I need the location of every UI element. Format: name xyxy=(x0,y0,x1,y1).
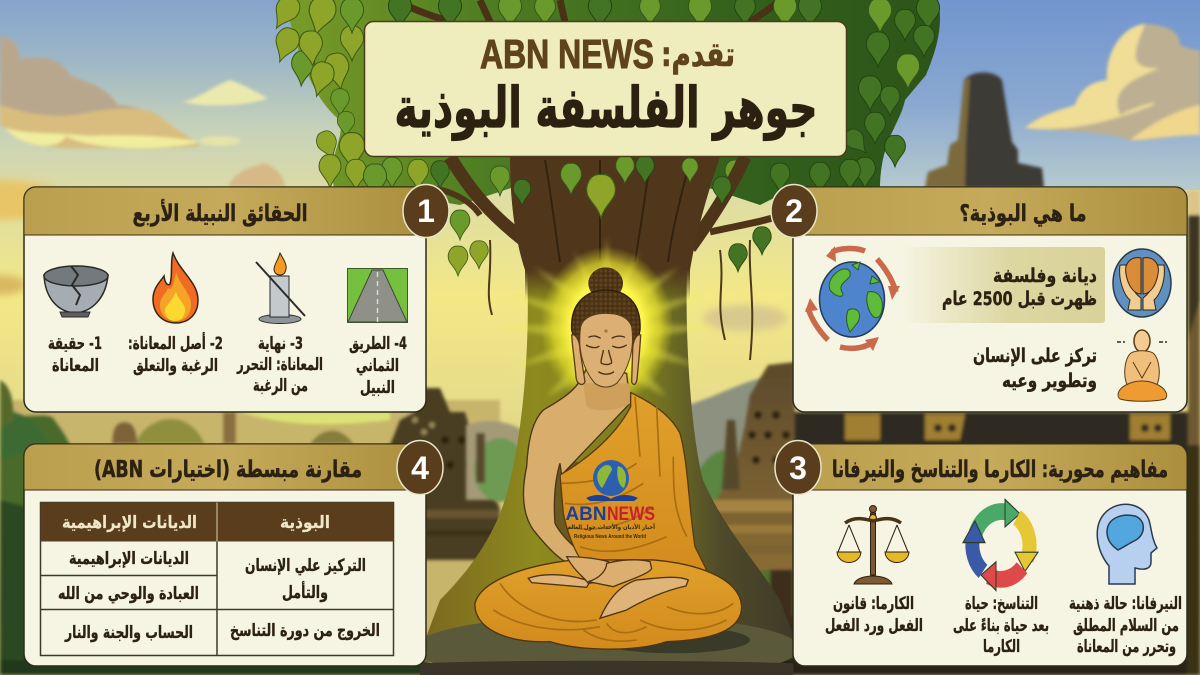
label karma xyxy=(825,594,923,636)
label reincarnation: التناسخ: حياة xyxy=(965,594,1038,614)
highlight band xyxy=(900,247,1105,323)
icon: globe with arrows xyxy=(805,246,900,351)
badge 4 xyxy=(397,440,443,494)
panel 3 header xyxy=(793,444,1187,490)
hair xyxy=(572,267,640,347)
face and ears xyxy=(572,313,641,387)
text: religion and philosophy: ظهرت قبل 2500 عام xyxy=(942,288,1097,310)
badge 4: 4 xyxy=(411,450,429,486)
title line one: ABN NEWS xyxy=(480,31,654,77)
ABN NEWS logo: Religious News Around the World xyxy=(574,534,646,540)
title panel xyxy=(364,22,846,156)
label 3: من الرغبة xyxy=(253,376,308,396)
text: focus on human: تركز على الإنسان xyxy=(973,345,1097,367)
ABN NEWS logo: NEWS xyxy=(607,504,655,525)
table header: البوذية xyxy=(280,513,330,533)
label nirvana xyxy=(1069,594,1182,657)
label karma: الفعل ورد الفعل xyxy=(825,616,923,636)
robe upper xyxy=(560,393,707,583)
label reincarnation: بعد حياة بناءً على xyxy=(953,616,1049,636)
label 4: الثماني xyxy=(356,356,399,376)
table rows: الحساب والجنة والنار xyxy=(64,623,193,643)
icon: meditating person xyxy=(1117,330,1167,401)
icon: flame xyxy=(153,253,198,323)
panel 4 heading: مقارنة مبسطة (اختيارات ABN) xyxy=(94,457,362,483)
panel 4: comparison xyxy=(24,444,426,666)
background: right stupa xyxy=(710,362,796,570)
label 1 xyxy=(48,334,102,376)
table rows: والتأمل xyxy=(282,581,328,603)
title line one: تقدم: xyxy=(661,35,735,75)
tree: branches below title xyxy=(430,157,790,248)
panel 4 header xyxy=(24,444,426,490)
badge 1 xyxy=(403,184,449,238)
background: left stupa xyxy=(390,388,500,560)
text: focus on human: وتطوير وعيه xyxy=(1002,370,1097,392)
panel 2: what is buddhism xyxy=(793,187,1187,412)
table header: الديانات الإبراهيمية xyxy=(62,513,197,533)
ABN NEWS logo xyxy=(566,460,655,540)
label 4 xyxy=(349,334,407,398)
label 4: 4- الطريق xyxy=(349,334,407,354)
background: clouds xyxy=(0,24,1200,331)
robe legs xyxy=(475,560,742,649)
label karma: الكارما: قانون xyxy=(833,594,914,614)
label 1: 1- حقيقة xyxy=(48,334,102,354)
icon: head with brain xyxy=(1097,504,1157,584)
ABN NEWS logo: ABN xyxy=(566,504,606,525)
icon: brain in hands xyxy=(1113,249,1171,317)
stone seat xyxy=(413,615,800,675)
label 2 xyxy=(128,332,223,376)
label reincarnation xyxy=(953,594,1049,657)
panel 2 header xyxy=(793,187,1187,235)
text: religion and philosophy xyxy=(942,265,1097,310)
tree: canopy and branches xyxy=(267,0,940,205)
table rows: التركيز علي الإنسان xyxy=(245,556,366,576)
badge 2 xyxy=(771,184,817,238)
icon: extinguished candle xyxy=(256,253,305,324)
table rows xyxy=(58,549,380,643)
text: religion and philosophy: ديانة وفلسفة xyxy=(993,265,1097,287)
labels xyxy=(48,332,407,398)
label reincarnation: الكارما xyxy=(983,637,1020,657)
label 3: المعاناة: التحرر xyxy=(236,355,323,375)
badge 2: 2 xyxy=(785,193,803,229)
tree: trunk xyxy=(425,156,795,640)
label 2: الرغبة والتعلق xyxy=(133,356,218,376)
table rows: الديانات الإبراهيمية xyxy=(69,549,189,569)
icon: road xyxy=(348,268,408,322)
table rows: الخروج من دورة التناسخ xyxy=(230,621,380,641)
badge 3 xyxy=(775,440,821,494)
label 3: 3- نهاية xyxy=(258,334,303,354)
halo and rays xyxy=(500,237,713,407)
label 2: 2- أصل المعاناة: xyxy=(128,332,223,354)
body skin xyxy=(523,367,630,570)
background: mountains and right landscape xyxy=(466,190,1200,675)
comparison table xyxy=(40,502,394,656)
buddha figure xyxy=(413,237,800,675)
icon: rebirth cycle xyxy=(963,499,1038,591)
icon: broken bowl xyxy=(44,266,108,317)
label 1: المعاناة xyxy=(52,356,99,376)
background: left landscape xyxy=(0,380,500,675)
labels xyxy=(825,594,1182,657)
feet and hands xyxy=(528,557,688,618)
title line two: جوهر الفلسفة البوذية xyxy=(394,76,818,141)
table rows: العبادة والوحي من الله xyxy=(58,584,199,604)
panel 1 header xyxy=(24,187,426,235)
table header xyxy=(40,502,394,542)
label 3 xyxy=(236,334,323,396)
background: top-right stupa xyxy=(925,72,1044,188)
ABN NEWS logo: أخبار الأديان والأحداث حول العالم xyxy=(567,523,655,531)
panel 2 heading: ما هي البوذية؟ xyxy=(960,201,1086,227)
panel 3: key concepts xyxy=(793,444,1187,666)
gap shadow between arm and robe xyxy=(553,450,580,560)
label 4: النبيل xyxy=(360,378,395,398)
panel 1 heading: الحقائق النبيلة الأربع xyxy=(132,198,308,227)
badge 3: 3 xyxy=(789,450,807,486)
badge 1: 1 xyxy=(417,193,435,229)
panel 1: four noble truths xyxy=(24,187,426,412)
text: focus on human xyxy=(973,345,1097,392)
icon: scales of justice xyxy=(837,506,909,584)
